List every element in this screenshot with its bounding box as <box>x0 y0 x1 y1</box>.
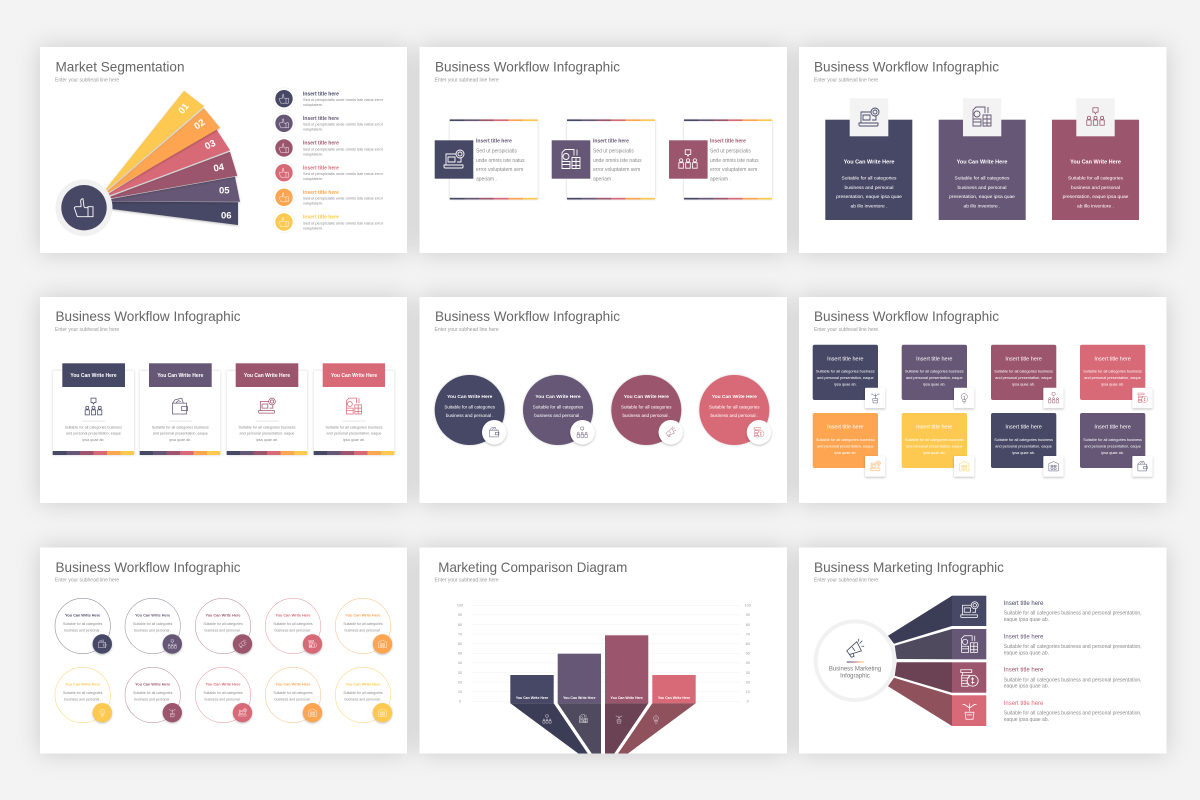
card 1: Insert title here <box>476 138 512 144</box>
ring 3 <box>195 598 252 654</box>
list item 5 <box>273 186 384 208</box>
tile 2: Insert title here <box>916 357 952 363</box>
fan chart: 06 <box>221 210 232 221</box>
tile 3 <box>991 345 1064 408</box>
chart gridlines and axes: 50 <box>458 652 462 656</box>
card 2: Suitable for all categories business <box>152 425 209 429</box>
card 1: ab illo inventore . <box>851 203 887 209</box>
fan chart: 03 <box>203 138 217 152</box>
card 1: error voluptatem sem <box>476 167 523 173</box>
chart gridlines and axes: 20 <box>458 680 462 684</box>
ring 10: Suitable for all categories <box>343 691 383 695</box>
card 3: Suitable for all categories business <box>239 425 296 429</box>
bar 4 <box>618 675 696 754</box>
list item 1: Sed ut perspiciatis unde omnis iste natus error <box>303 97 384 102</box>
fan chart: 04 <box>213 162 226 175</box>
tile 1: ipsa quae ab. <box>834 383 857 387</box>
list item 6: Sed ut perspiciatis unde omnis iste natus error <box>303 220 384 225</box>
ring 8: You Can Write Here <box>205 682 241 686</box>
ring 3: You Can Write Here <box>205 614 241 618</box>
chart gridlines and axes: 40 <box>746 661 750 665</box>
ring 1 <box>55 598 112 654</box>
ring 10: You Can Write Here <box>345 682 381 686</box>
card 1 <box>53 363 134 455</box>
tile 1: Suitable for all categories business <box>816 370 875 374</box>
arm 1 <box>888 596 986 644</box>
text item 2: eaque ipsa quae ab. <box>1004 650 1049 656</box>
tile 5: Insert title here <box>827 425 863 431</box>
tile 6: ipsa quae ab. <box>923 451 946 455</box>
subhead: Enter your subhead line here <box>434 78 499 84</box>
list item 1: Insert title here <box>303 92 339 98</box>
arm 2 <box>895 629 986 659</box>
text item 1: Insert title here <box>1004 601 1044 607</box>
tile 8: and personal presentation, eaque <box>1084 444 1141 448</box>
tile 7 <box>991 413 1064 477</box>
card 1: ipsa quae ab. <box>82 438 105 442</box>
bar 2 <box>558 654 601 754</box>
tile 4 <box>1080 345 1153 408</box>
tile 2: Suitable for all categories business <box>905 370 964 374</box>
ring 5 <box>335 598 392 654</box>
circle 3 <box>611 375 683 445</box>
card 3: Suitable for all categories <box>1068 176 1124 182</box>
circle 3: Suitable for all categories <box>621 405 672 410</box>
subhead: Enter your subhead line here <box>434 327 499 333</box>
text item 2: Suitable for all categories business and personal presentation, <box>1004 644 1142 650</box>
text item 2 <box>1004 634 1142 656</box>
card 1: You Can Write Here <box>844 159 894 165</box>
card 4: and personal presentation, eaque <box>327 432 381 436</box>
tile 8: Insert title here <box>1094 425 1131 431</box>
text item 3 <box>1004 668 1142 690</box>
title: Business Workflow Infographic <box>814 308 999 324</box>
title: Business Workflow Infographic <box>56 308 240 324</box>
card 2: You Can Write Here <box>157 373 204 379</box>
panel: workflow cards with side icon <box>420 47 787 253</box>
title: Business Workflow Infographic <box>56 559 240 575</box>
card 3: presentation, eaque ipsa quae <box>1063 194 1129 200</box>
ring 5: business and personal . <box>345 629 382 633</box>
chart gridlines and axes: 100 <box>745 604 751 608</box>
circle 4: business and personal . <box>711 413 758 418</box>
list item 4: Insert title here <box>303 165 339 171</box>
tile 4: and personal presentation, eaque <box>1084 376 1141 380</box>
hub circle: Business Marketing <box>829 666 881 672</box>
card 1: Suitable for all categories <box>842 176 897 182</box>
tile 7: ipsa quae ab. <box>1012 451 1035 455</box>
bar 1: You Can Write Here <box>516 696 548 700</box>
tile 8: ipsa quae ab. <box>1101 451 1124 455</box>
chart gridlines and axes: 40 <box>458 661 462 665</box>
circle 2: business and personal . <box>534 413 582 418</box>
hub with thumb icon <box>56 179 112 236</box>
ring 8 <box>195 667 252 723</box>
card 2: aperiam . <box>593 176 614 182</box>
circle 1: business and personal . <box>446 413 493 418</box>
list item 5: voluptatem. <box>303 201 323 206</box>
bar 1 <box>510 675 588 754</box>
tile 5: ipsa quae ab. <box>834 451 857 455</box>
subhead: Enter your subhead line here <box>55 578 119 584</box>
tile 1 <box>813 345 885 408</box>
fan chart: 02 <box>192 117 207 132</box>
text item 1: Suitable for all categories business and personal presentation, <box>1004 611 1142 617</box>
list item 4: Sed ut perspiciatis unde omnis iste natus error <box>303 171 384 176</box>
ring 10: business and personal . <box>345 698 382 702</box>
card 3: Insert title here <box>710 138 746 144</box>
ring 7: Suitable for all categories <box>133 691 173 695</box>
text item 1: eaque ipsa quae ab. <box>1004 617 1049 623</box>
card 4: You Can Write Here <box>331 373 377 379</box>
tile 7: Insert title here <box>1005 425 1042 431</box>
list item 6: Insert title here <box>303 215 339 221</box>
arm 4 <box>888 678 986 726</box>
list item 2: Sed ut perspiciatis unde omnis iste natus error <box>303 122 384 127</box>
chart gridlines and axes: 70 <box>458 632 462 636</box>
chart gridlines and axes: 90 <box>458 613 462 617</box>
text item 3: Suitable for all categories business and personal presentation, <box>1004 677 1142 683</box>
fan chart <box>106 91 240 225</box>
tile 4: Suitable for all categories business <box>1083 370 1142 374</box>
list item 2: Insert title here <box>303 116 339 122</box>
circle 1: You Can Write Here <box>447 394 493 400</box>
card 4: ipsa quae ab. <box>343 438 365 442</box>
title: Business Workflow Infographic <box>435 58 620 74</box>
chart gridlines and axes: 30 <box>458 671 462 675</box>
card 2: Insert title here <box>593 138 629 144</box>
ring 6: You Can Write Here <box>65 682 100 686</box>
panel: workflow tile grid <box>799 297 1166 503</box>
ring 5: Suitable for all categories <box>343 622 383 626</box>
card 3: unde omnis iste natus <box>710 158 759 164</box>
card 3: Sed ut perspiciatis <box>710 149 751 155</box>
list item 4: voluptatem. <box>303 176 323 181</box>
card 2: business and personal <box>958 185 1006 191</box>
tile 5: Suitable for all categories business <box>816 438 875 442</box>
ring 8: business and personal . <box>205 698 242 702</box>
card 3: and personal presentation, eaque <box>240 432 294 436</box>
card 1 <box>435 119 538 200</box>
card 3: ipsa quae ab. <box>256 438 278 442</box>
card 1: aperiam . <box>476 176 497 182</box>
card 1: business and personal <box>845 185 893 191</box>
text item 4: eaque ipsa quae ab. <box>1004 717 1049 723</box>
tile 3: Suitable for all categories business <box>994 370 1053 374</box>
tile 7: and personal presentation, eaque <box>995 444 1052 448</box>
card 3: error voluptatem sem <box>710 167 757 173</box>
circle 2 <box>523 375 595 445</box>
subhead: Enter your subhead line here <box>55 78 119 84</box>
text item 2: Insert title here <box>1004 634 1044 640</box>
card 2: Suitable for all categories <box>955 176 1010 182</box>
hub circle <box>816 621 894 700</box>
subhead: Enter your subhead line here <box>434 578 499 584</box>
title: Business Workflow Infographic <box>814 58 999 74</box>
card 2: ab illo inventore . <box>964 203 1000 209</box>
card 3 <box>227 363 307 455</box>
tile 2: and personal presentation, eaque <box>906 376 963 380</box>
ring 7: You Can Write Here <box>135 682 170 686</box>
chart gridlines and axes: 60 <box>458 642 462 646</box>
ring 6 <box>55 667 112 723</box>
ring 4 <box>265 598 322 654</box>
card 1: unde omnis iste natus <box>476 158 525 164</box>
bar 4: You Can Write Here <box>658 696 690 700</box>
ring 7: business and personal . <box>134 698 171 702</box>
text item 4: Suitable for all categories business and personal presentation, <box>1004 711 1142 717</box>
text item 3: eaque ipsa quae ab. <box>1004 684 1049 690</box>
title: Market Segmentation <box>56 58 184 74</box>
ring 2: Suitable for all categories <box>133 622 173 626</box>
ring 2: You Can Write Here <box>135 614 170 618</box>
text item 1 <box>1004 601 1142 623</box>
chart gridlines and axes <box>457 604 751 704</box>
tile 6: Suitable for all categories business <box>905 438 964 442</box>
ring 8: Suitable for all categories <box>203 691 243 695</box>
chart gridlines and axes: 0 <box>747 700 749 704</box>
card 1: You Can Write Here <box>70 373 117 379</box>
card 1: Suitable for all categories business <box>65 425 122 429</box>
card 3: ab illo inventore . <box>1077 203 1114 209</box>
ring 2 <box>125 598 182 654</box>
bar 3: You Can Write Here <box>611 696 643 700</box>
list item 1: voluptatem. <box>303 102 323 107</box>
panel: workflow tall cards <box>799 47 1166 253</box>
chart gridlines and axes: 0 <box>459 700 461 704</box>
card 2: error voluptatem sem <box>593 167 640 173</box>
ring 6: Suitable for all categories <box>63 691 103 695</box>
chart gridlines and axes: 20 <box>746 680 750 684</box>
ring 5: You Can Write Here <box>345 614 381 618</box>
ring 4: You Can Write Here <box>275 614 311 618</box>
title: Business Marketing Infographic <box>814 559 1004 575</box>
chart gridlines and axes: 60 <box>746 642 750 646</box>
circle 1 <box>435 375 507 445</box>
tile 1: Insert title here <box>827 357 863 363</box>
circle 2: Suitable for all categories <box>533 405 584 410</box>
card 1: Sed ut perspiciatis <box>476 149 517 155</box>
list item 6 <box>273 211 384 233</box>
subhead: Enter your subhead line here <box>814 327 878 333</box>
panel: marketing comparison diagram <box>420 548 787 754</box>
list item 3: voluptatem. <box>303 151 323 156</box>
tile 2 <box>902 345 974 408</box>
ring 3: business and personal . <box>205 629 242 633</box>
ring 6: business and personal . <box>64 698 101 702</box>
bar 3 <box>605 635 648 754</box>
panel: market segmentation <box>40 47 407 253</box>
tile 6 <box>902 413 974 477</box>
list item 3: Insert title here <box>303 141 339 147</box>
list item 1 <box>273 88 384 110</box>
tile 3: Insert title here <box>1005 357 1042 363</box>
list item 5: Insert title here <box>303 190 339 196</box>
tile 7: Suitable for all categories business <box>994 438 1053 442</box>
circle 2: You Can Write Here <box>535 394 581 400</box>
ring 1: You Can Write Here <box>65 614 100 618</box>
ring 9: business and personal . <box>275 698 312 702</box>
circle 4 <box>699 375 771 445</box>
tile 6: and personal presentation, eaque <box>906 444 963 448</box>
tile 2: ipsa quae ab. <box>923 383 946 387</box>
tile 8 <box>1080 413 1153 477</box>
subhead: Enter your subhead line here <box>55 327 119 333</box>
card 3 <box>669 119 772 200</box>
card 3: You Can Write Here <box>244 373 290 379</box>
tile 3: ipsa quae ab. <box>1012 383 1035 387</box>
bar 2: You Can Write Here <box>563 696 596 700</box>
tile 5: and personal presentation, eaque <box>817 444 874 448</box>
list item 5: Sed ut perspiciatis unde omnis iste natus error <box>303 196 384 201</box>
tile 3: and personal presentation, eaque <box>995 376 1052 380</box>
circle 1: Suitable for all categories <box>444 405 496 410</box>
circle 4: You Can Write Here <box>712 394 757 400</box>
ring 4: Suitable for all categories <box>273 622 313 626</box>
text item 4 <box>1004 701 1142 723</box>
chart gridlines and axes: 80 <box>458 623 462 627</box>
card 1: and personal presentation, eaque <box>66 432 121 436</box>
text item 4: Insert title here <box>1004 701 1044 707</box>
card 3: business and personal <box>1071 185 1120 191</box>
card 4 <box>314 363 394 455</box>
ring 2: business and personal . <box>134 629 171 633</box>
card 4: Suitable for all categories business <box>326 425 383 429</box>
card 2: presentation, eaque ipsa quae <box>949 194 1015 200</box>
card 3: aperiam . <box>710 176 731 182</box>
chart gridlines and axes: 70 <box>746 632 750 636</box>
circle 4: Suitable for all categories <box>709 405 760 410</box>
chart gridlines and axes: 50 <box>746 652 750 656</box>
tile 4: Insert title here <box>1094 357 1131 363</box>
ring 9 <box>265 667 322 723</box>
ring 9: Suitable for all categories <box>273 691 313 695</box>
arm 3 <box>895 662 986 693</box>
tile 1: and personal presentation, eaque <box>817 376 874 380</box>
subhead: Enter your subhead line here <box>814 78 878 84</box>
chart gridlines and axes: 90 <box>746 613 750 617</box>
text item 3: Insert title here <box>1004 668 1044 674</box>
card 2 <box>140 363 220 455</box>
card 2 <box>939 98 1026 220</box>
card 2: and personal presentation, eaque <box>153 432 208 436</box>
chart gridlines and axes: 80 <box>746 623 750 627</box>
card 3 <box>1052 98 1139 220</box>
card 2: Sed ut perspiciatis <box>593 149 634 155</box>
circle 3: You Can Write Here <box>624 394 669 400</box>
ring 1: Suitable for all categories <box>63 622 103 626</box>
ring 3: Suitable for all categories <box>203 622 243 626</box>
ring 9: You Can Write Here <box>275 682 311 686</box>
fan chart: 05 <box>219 186 230 197</box>
chart gridlines and axes: 30 <box>746 671 750 675</box>
card 3: You Can Write Here <box>1070 159 1121 165</box>
chart gridlines and axes: 10 <box>458 690 462 694</box>
list item 6: voluptatem. <box>303 225 323 230</box>
title: Business Workflow Infographic <box>435 308 620 324</box>
ring 4: business and personal . <box>275 629 312 633</box>
card 2: You Can Write Here <box>957 159 1007 165</box>
ring 7 <box>125 667 182 723</box>
card 1 <box>825 98 912 220</box>
panel: workflow header cards <box>40 297 407 503</box>
hub circle: Infographic <box>840 674 870 680</box>
card 1: presentation, eaque ipsa quae <box>836 194 902 200</box>
list item 3 <box>273 137 384 159</box>
list item 4 <box>273 162 384 184</box>
chart gridlines and axes: 10 <box>746 690 750 694</box>
tile 4: ipsa quae ab. <box>1101 383 1124 387</box>
ring 1: business and personal . <box>64 629 101 633</box>
panel: business marketing infographic <box>799 548 1166 754</box>
subhead: Enter your subhead line here <box>814 578 878 584</box>
card 2 <box>552 119 655 200</box>
card 2: unde omnis iste natus <box>593 158 642 164</box>
tile 6: Insert title here <box>916 425 952 431</box>
panel: workflow ring grid <box>40 548 407 754</box>
fan chart: 01 <box>176 101 192 116</box>
list item 3: Sed ut perspiciatis unde omnis iste natus error <box>303 146 384 151</box>
chart gridlines and axes: 100 <box>457 604 463 608</box>
list item 2 <box>273 112 384 134</box>
list item 2: voluptatem. <box>303 127 323 132</box>
tile 5 <box>813 413 885 477</box>
circle 3: business and personal . <box>623 413 670 418</box>
panel: workflow circles <box>420 297 787 503</box>
title: Marketing Comparison Diagram <box>438 559 627 575</box>
tile 8: Suitable for all categories business <box>1083 438 1142 442</box>
card 2: ipsa quae ab. <box>169 438 191 442</box>
ring 10 <box>335 667 392 723</box>
